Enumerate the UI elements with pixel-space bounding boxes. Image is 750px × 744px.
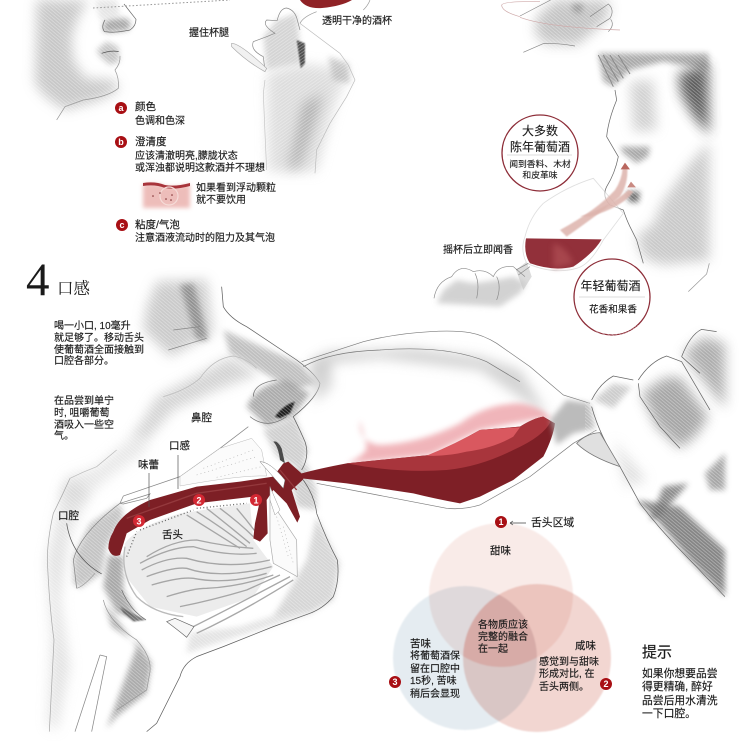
list item a: colour: 色调和色深 — [135, 116, 185, 127]
illustration: taster profile top left — [25, 0, 230, 120]
key: tongue zones: 舌头区域 — [531, 517, 574, 529]
tip body: 如果你想要品尝 — [642, 668, 718, 680]
icon: aroma arrows — [560, 163, 636, 237]
list item c: viscosity: 注意酒液流动时的阻力及其气泡 — [135, 233, 275, 244]
text: salty note: 感觉到与甜味 — [539, 657, 599, 668]
key: tongue zones — [495, 516, 574, 529]
illustration: hand swirling glass top right — [502, 0, 620, 52]
illustration: tongue — [122, 503, 293, 637]
label: salty: 咸味 — [575, 640, 596, 652]
text: bitter: 苦味 — [410, 638, 431, 650]
text: salty note: 舌头两侧。 — [539, 682, 589, 693]
illustration: hand holding large glass — [577, 325, 730, 600]
illustration: wine path through mouth: 2 — [196, 496, 202, 506]
list item c: viscosity — [116, 219, 275, 244]
illustration: sniffing face on right — [595, 52, 715, 292]
text: venn centre: 在一起 — [478, 644, 508, 655]
text: sip instructions: 喝一小口, 10毫升 — [54, 321, 131, 332]
text: bitter: 15秒, 苦味 — [410, 676, 457, 687]
list item b: clarity: 澄清度 — [135, 136, 166, 148]
tip body: 一下口腔。 — [642, 708, 696, 720]
label: nasal cavity: 鼻腔 — [191, 412, 212, 424]
badge c: c — [119, 220, 124, 230]
label: grip the stem: 握住杯腿 — [189, 28, 229, 39]
text: bitter: 留在口腔中 — [410, 664, 460, 675]
list item b: clarity: 或浑浊都说明这款酒并不理想 — [135, 163, 265, 174]
list item c: viscosity: 粘度/气泡 — [135, 219, 180, 231]
label: tongue: 舌头 — [162, 529, 183, 541]
tip body — [642, 668, 718, 720]
text: bitter — [410, 638, 460, 700]
note: floating particles: 如果看到浮动颗粒 — [196, 183, 276, 194]
text: tannin tip — [54, 395, 114, 442]
text: tannin tip: 在品尝到单宁 — [54, 396, 114, 407]
label: mouthfeel: 口感 — [169, 440, 190, 452]
label: taste buds: 味蕾 — [138, 459, 159, 471]
text: sip instructions: 就足够了。移动舌头 — [54, 333, 144, 344]
illustration: mouth cross-section head — [45, 280, 345, 735]
list item b: clarity: 应该清澈明亮,朦胧状态 — [135, 151, 238, 162]
heading: section 4: 口感 — [57, 279, 90, 298]
text: tannin tip: 酒吸入一些空 — [54, 420, 114, 431]
badge 3 — [389, 676, 401, 688]
badge 2: 2 — [603, 679, 608, 689]
callout: young wine circle: 花香和果香 — [589, 304, 637, 316]
list item a: colour — [115, 101, 185, 127]
chart: three circle taste venn — [393, 523, 611, 732]
label: swirl and sniff: 摇杯后立即闻香 — [443, 245, 513, 256]
text: sip instructions: 口腔各部分。 — [54, 356, 114, 367]
badge a: a — [118, 103, 124, 113]
text: salty note: 形成对比, 在 — [539, 669, 595, 680]
badge 2 — [600, 678, 612, 690]
badge 1: 1 — [498, 517, 504, 527]
badge 3: 3 — [392, 677, 398, 687]
illustration: wine glass being sniffed — [434, 178, 623, 307]
text: venn centre: 完整的融合 — [478, 632, 528, 643]
note: floating particles: 就不要饮用 — [196, 195, 246, 206]
text: bitter: 将葡萄酒保 — [410, 651, 460, 662]
text: sip instructions — [54, 320, 144, 367]
illustration: wine path through mouth: 3 — [136, 516, 142, 526]
text: tannin tip: 时, 咀嚼葡萄 — [54, 408, 110, 419]
text: tannin tip: 气。 — [54, 431, 74, 442]
callout: young wine circle: 年轻葡萄酒 — [580, 279, 641, 293]
badge b — [115, 136, 127, 148]
badge a — [115, 102, 127, 114]
callout: young wine circle — [574, 259, 650, 335]
illustration: hand holding glass stem — [232, 0, 370, 177]
heading: section 4: 4 — [26, 254, 50, 306]
callout: aged wine circle: 和皮革味 — [522, 169, 558, 180]
text: salty note — [539, 656, 599, 693]
illustration: wine path through mouth — [108, 441, 303, 556]
list item a: colour: 颜色 — [135, 101, 156, 113]
leader lines — [149, 455, 178, 507]
tip body: 品尝后用水清洗 — [642, 695, 718, 707]
callout: aged wine circle: 闻到香料、木材 — [509, 158, 571, 169]
text: venn centre: 各物质应该 — [478, 620, 528, 631]
text: sip instructions: 使葡萄酒全面接触到 — [54, 345, 144, 356]
callout: aged wine circle: 大多数 — [522, 123, 558, 138]
illustration: swatch of floating particles — [143, 182, 190, 208]
callout: aged wine circle: 陈年葡萄酒 — [510, 139, 570, 154]
badge c — [116, 219, 128, 231]
text: bitter: 稍后会显现 — [410, 689, 460, 700]
arrow: tongue zone key — [510, 521, 526, 525]
illustration: wine path through mouth: 1 — [253, 496, 259, 506]
tip body: 得更精确, 醉好 — [642, 681, 713, 693]
badge b: b — [118, 137, 124, 147]
label: clean glass: 透明干净的酒杯 — [322, 16, 392, 27]
heading: section 4 — [26, 254, 90, 306]
badge 1 — [495, 516, 507, 528]
illustration: palate bone — [180, 438, 297, 577]
label: sweet: 甜味 — [490, 545, 511, 557]
callout: aged wine circle — [502, 115, 578, 191]
panel: tip — [642, 644, 718, 720]
note: floating particles — [196, 182, 276, 206]
label: oral cavity: 口腔 — [58, 510, 79, 522]
text: venn centre — [478, 619, 528, 655]
list item b: clarity — [115, 136, 265, 174]
tip heading: 提示 — [642, 644, 672, 661]
illustration: large tilted wine glass — [302, 331, 597, 509]
venn centre overlap — [464, 596, 536, 666]
